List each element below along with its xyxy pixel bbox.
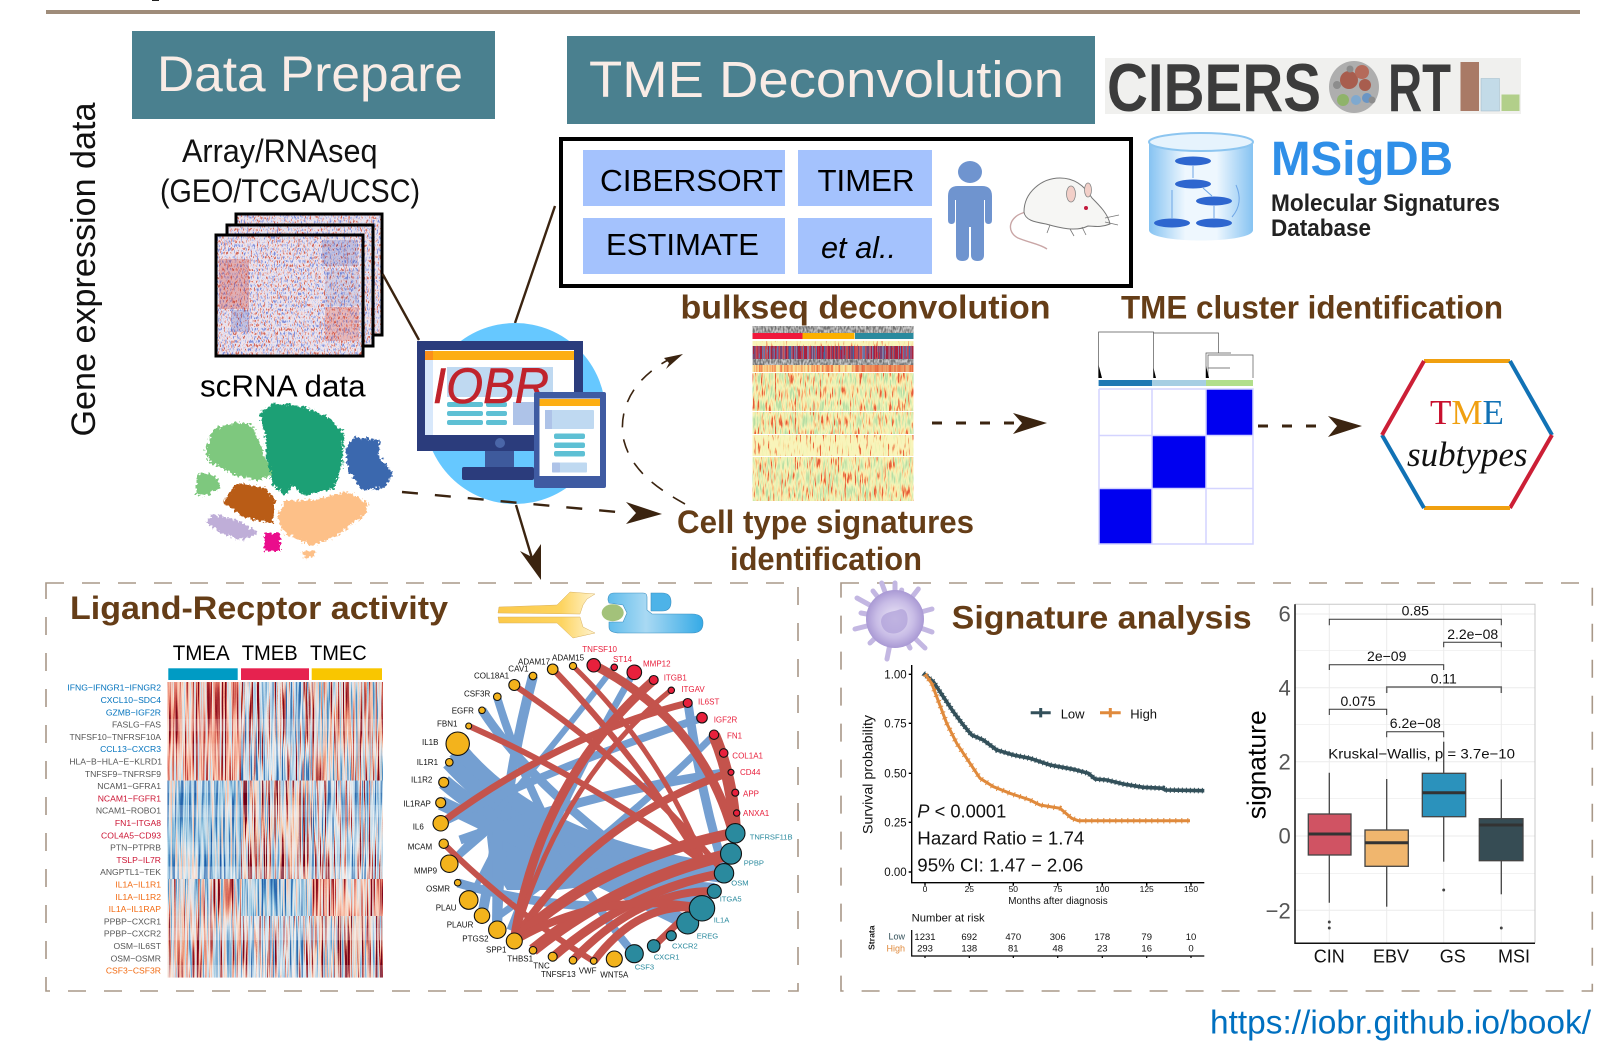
heading: signature analysis: Signature analysis [952,599,1252,635]
significance brackets: 0.075 [1340,693,1376,709]
node labels: MCAM [408,843,432,852]
node labels: OSM [731,879,749,888]
heading: cell type signatures: identification [730,541,922,577]
heading: TME cluster identification: TME cluster identification [1121,290,1503,326]
x tick labels: 25 [965,884,974,894]
significance brackets: Kruskal−Wallis, p = 3.7e−10 [1328,746,1515,762]
arrow: curved dashed to bulkseq [622,354,685,504]
risk table: 23 [1097,944,1108,955]
y axis labels: 6 [1278,602,1291,627]
logo: MSigDB: MSigDB [1271,133,1453,186]
dendrogram [1099,332,1253,378]
logo: MSigDB: Molecular Signatures [1271,190,1500,217]
node labels: IL1RAP [403,800,431,809]
node labels: CAV1 [508,665,529,674]
heatmap row labels: CCL13−CXCR3 [100,744,161,754]
node labels: CXCR2 [672,942,698,951]
panel: ligand receptor activity [46,583,798,991]
risk table: 178 [1094,932,1110,943]
x axis labels: CIN [1314,947,1345,967]
x tick labels: 150 [1184,884,1198,894]
heatmap column titles: TMEA [173,642,230,665]
box: GS [1422,742,1466,891]
node labels: IGF2R [714,716,737,725]
statistics: P < 0.0001 [917,800,1006,821]
x axis labels: GS [1440,947,1466,967]
node labels: TNFRSF11B [750,833,793,842]
x tick labels: 0 [923,884,928,894]
chart: circos ligand receptor network [403,645,793,979]
node labels: ADAM15 [552,654,585,663]
panel: deconvolution methods [561,139,1131,286]
node labels: ITGAV [681,685,705,694]
node labels: VWF [579,966,597,975]
links: red [441,665,735,961]
chart: consensus cluster matrix [1099,332,1253,544]
header: data prepare: Data Prepare [157,46,463,102]
legend: Low [1061,707,1085,722]
x axis labels [1314,947,1530,967]
method: CIBERSORT: CIBERSORT [600,163,783,198]
risk table: 293 [917,944,933,955]
method: TIMER [798,150,932,206]
heatmap annotation bars [168,668,382,680]
risk table: 0 [1188,944,1194,955]
logo: CIBERSORT: RT [1388,50,1451,126]
y axis title: signature [1242,710,1272,819]
node labels: EREG [697,932,718,941]
heading: ligand receptor: Ligand-Recptor activity [70,590,448,626]
y axis labels: 4 [1278,675,1291,700]
connector: arrays to IOBR [383,274,419,340]
risk table: 306 [1050,932,1066,943]
statistics: Hazard Ratio = 1.74 [917,827,1084,848]
heatmap row labels: OSM−OSMR [111,953,161,963]
y axis labels [1266,602,1291,923]
y axis labels: 2 [1278,749,1291,774]
hexagon: TME subtypes: TME [1430,393,1504,432]
x axis labels: MSI [1498,947,1530,967]
node labels: EGFR [452,707,474,716]
method: ESTIMATE: ESTIMATE [606,227,759,262]
node labels: COL18A1 [474,672,510,681]
heatmap column titles: TMEC [310,642,367,665]
significance brackets: 2e−09 [1367,648,1407,664]
icon: IOBR computer [417,323,606,504]
risk table: 81 [1008,944,1019,955]
method: ESTIMATE [583,218,785,274]
text: array sources: Array/RNAseq [182,133,378,169]
heatmap row labels [67,683,162,976]
axis titles [859,715,1108,907]
method: TIMER: TIMER [818,163,914,198]
hexagon: TME subtypes: subtypes [1407,435,1528,474]
heatmap row labels: TSLP−IL7R [116,855,161,865]
arrow: IOBR to ligand receptor panel [516,505,541,580]
heatmap row labels: TNFSF9−TNFRSF9 [85,769,161,779]
method: CIBERSORT [583,150,785,206]
heading: cell type signatures: Cell type signatures [677,504,974,540]
heatmap row labels: IL1A−IL1RAP [109,904,161,914]
heatmap row labels: PPBP−CXCR1 [104,916,161,926]
node labels: PPBP [744,859,764,868]
node labels: FBN1 [437,720,458,729]
arrow: heatmap to cluster [932,413,1047,434]
node labels: ANXA1 [743,809,770,818]
heatmap: bulkseq deconvolution [752,326,914,501]
heading: cell type signatures [677,504,974,577]
risk table: 16 [1141,944,1152,955]
risk table: 470 [1005,932,1021,943]
risk table: 79 [1141,932,1152,943]
node labels: IL1A [714,916,730,925]
box: EBV [1365,779,1408,907]
heatmap row labels: NCAM1−GFRA1 [97,781,161,791]
header: data prepare [132,31,495,119]
heading: bulkseq deconvolution: bulkseq deconvolution [680,288,1050,326]
arrow: scRNA to cell type signatures [402,492,662,524]
y tick labels: 0.25 [884,818,907,830]
curve: low [923,673,1204,791]
logo: CIBERSORT: CIBERS [1107,50,1321,126]
node labels: MMP12 [643,660,671,669]
heatmap row labels: ANGPTL1−TEK [100,867,161,877]
node labels: APP [743,790,759,799]
heatmap row labels: IL1A−IL1R2 [115,892,161,902]
x axis labels: EBV [1373,947,1409,967]
significance brackets: 6.2e−08 [1390,715,1441,731]
risk table: Low [888,932,905,942]
node labels: ITGA5 [720,895,742,904]
text: array sources [160,133,420,209]
risk table: 138 [961,944,977,955]
icon: immune cell [855,583,932,659]
y tick labels: 0.75 [884,718,907,730]
axes [909,665,1204,886]
node labels: FN1 [727,732,743,741]
chart: Kaplan-Meier survival [859,665,1204,958]
links: blue [441,667,731,954]
logo: CIBERSORT [1105,50,1521,126]
icon: mouse [1010,178,1119,249]
heatmap row labels: IFNG−IFNGR1−IFNGR2 [67,683,161,693]
y axis labels: −2 [1266,898,1291,923]
text: scRNA data: scRNA data [200,368,366,404]
y tick labels: 1.00 [884,670,907,682]
significance brackets: 2.2e−08 [1447,626,1498,642]
risk table: 1231 [914,932,936,943]
nodes: teal [625,824,745,963]
heatmap stack: expression arrays [216,214,382,356]
node labels: OSMR [426,885,450,894]
node labels: IL1R1 [417,758,439,767]
axis titles: Months after diagnosis [1008,896,1108,907]
vertical label: gene expression data: Gene expression data [65,102,103,436]
node labels: CD44 [740,768,761,777]
legend: High [1130,707,1157,722]
heatmap row labels: PTN−PTPRB [110,843,161,853]
chart: scRNA tSNE clusters [196,403,393,559]
y axis labels: 0 [1278,823,1291,848]
x tick labels: 125 [1140,884,1154,894]
node labels: TNFSF10 [582,645,618,654]
arrow: cluster to subtypes [1258,416,1362,437]
connector: IOBR to methods [515,206,555,323]
label: IOBR: IOBR [433,358,549,414]
risk table: 692 [961,932,977,943]
node labels: COL1A1 [732,752,764,761]
method: et al [798,218,932,274]
significance brackets: 0.85 [1402,603,1429,619]
box: MSI [1479,779,1523,929]
node labels: ITGB1 [664,674,687,683]
node labels: THBS1 [507,954,534,963]
icon: human [948,161,992,261]
axis titles: Survival probability [859,715,875,834]
nodes: red [587,659,740,816]
heatmap column titles: TMEB [242,642,298,665]
risk table: High [886,944,905,954]
method: et al: et al.. [821,230,896,265]
significance brackets [1328,603,1515,762]
node labels: WNT5A [600,970,629,979]
icon: ligand and receptor [498,592,703,638]
x tick labels: 100 [1095,884,1110,894]
y tick labels [884,670,907,879]
heatmap row labels: CSF3−CSF3R [106,966,161,976]
x tick labels [923,884,1198,894]
y tick labels: 0.50 [884,768,907,780]
nodes: yellow [433,662,622,967]
risk table: Number at risk [912,913,985,925]
node labels: IL6ST [698,698,719,707]
node labels: SPP1 [486,945,507,954]
curve: high [925,674,1190,821]
node labels: PLAUR [447,920,474,929]
statistics: 95% CI: 1.47 − 2.06 [917,855,1083,876]
icon: database cylinder [1149,133,1253,240]
text: array sources: (GEO/TCGA/UCSC) [160,173,420,209]
x tick labels: 75 [1053,884,1063,894]
heatmap row labels: TNFSF10−TNFRSF10A [70,732,161,742]
heatmap row labels: COL4A5−CD93 [101,830,161,840]
risk table [867,913,1204,958]
node labels: CXCR1 [654,953,679,962]
node labels: IL1R2 [411,776,433,785]
node labels: ST14 [613,655,633,664]
node labels: CSF3R [464,690,490,699]
heatmap row labels: IL1A−IL1R1 [115,880,161,890]
heatmap row labels: HLA−B−HLA−E−KLRD1 [69,756,162,766]
heatmap: ligand receptor pairs [168,682,383,977]
panel: signature analysis [841,583,1592,991]
header: TME deconvolution: TME Deconvolution [589,51,1064,108]
node labels [403,645,793,979]
heatmap column titles [173,642,367,665]
hexagon: TME subtypes [1382,361,1552,508]
risk table: Strata [867,925,877,950]
grid [1295,604,1535,943]
heatmap row labels: PPBP−CXCR2 [104,929,161,939]
heatmap row labels: FN1−ITGA8 [115,818,161,828]
heatmap row labels: CXCL10−SDC4 [101,695,161,705]
node labels: CSF3 [635,963,654,972]
header: TME deconvolution [567,36,1095,124]
heatmap row labels: NCAM1−FGFR1 [98,793,161,803]
risk table: 10 [1186,932,1196,943]
risk table: 48 [1052,944,1063,955]
heatmap row labels: NCAM1−ROBO1 [96,806,161,816]
significance brackets: 0.11 [1431,671,1457,687]
logo: MSigDB: Database [1271,215,1371,242]
node labels: PLAU [436,904,457,913]
heatmap row labels: OSM−IL6ST [113,941,162,951]
top rule [46,0,1580,14]
y tick labels: 0.00 [884,867,907,879]
statistics [917,800,1084,876]
heatmap row labels: FASLG−FAS [112,720,161,730]
x tick labels: 50 [1009,884,1018,894]
heatmap row labels: GZMB−IGF2R [106,707,161,717]
chart: boxplot [1242,602,1535,967]
node labels: ADAM17 [518,658,551,667]
node labels: PTGS2 [462,934,489,943]
node labels: MMP9 [414,867,438,876]
box: CIN [1308,773,1351,929]
node labels: IL6 [413,823,424,832]
legend [1031,707,1157,722]
node labels: TNC [533,962,550,971]
node labels: TNFSF13 [541,970,576,979]
link: book URL: https://iobr.github.io/book/ [1210,1004,1592,1040]
logo: MSigDB [1149,133,1500,242]
node labels: IL1B [422,738,438,747]
